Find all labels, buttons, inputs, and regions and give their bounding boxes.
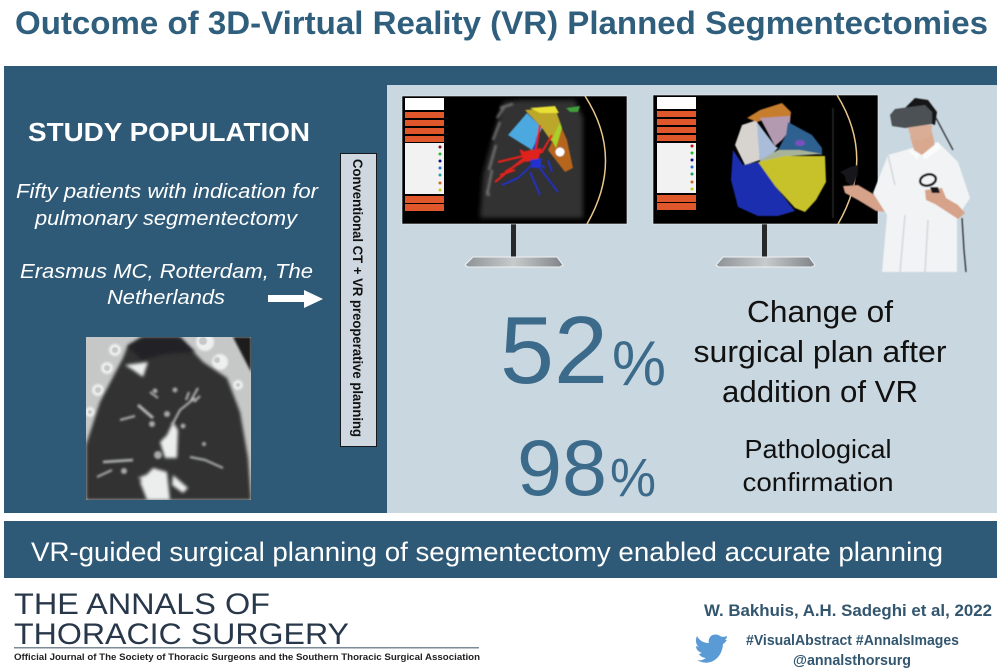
icon: twitter bird xyxy=(696,634,727,663)
stat: 98%: 98 xyxy=(517,423,607,512)
credit: authors: W. Bakhuis, A.H. Sadeghi et al, 2022 xyxy=(704,601,992,620)
screen xyxy=(653,95,878,224)
monitor: VR segment model xyxy=(653,95,878,267)
screen xyxy=(402,96,627,224)
stat: 98%: % xyxy=(610,448,656,508)
text: location: Netherlands xyxy=(107,287,225,309)
head xyxy=(907,125,932,140)
label: planning box xyxy=(340,154,376,446)
title: Outcome of 3D-Virtual Reality (VR) Planned Segmentectomies xyxy=(15,5,988,41)
text: pathological confirmation: Pathological xyxy=(744,434,892,464)
neck xyxy=(910,132,935,155)
image: CT lung scan xyxy=(85,333,251,500)
ring controller xyxy=(919,173,937,187)
stat: 98% xyxy=(517,423,656,512)
headset xyxy=(890,105,932,128)
label: planning box: Conventional CT + VR preoperative planning xyxy=(350,159,366,437)
panel: study population xyxy=(16,117,323,500)
text: hashtags: #VisualAbstract #AnnalsImages xyxy=(746,633,959,649)
stat: 52%: 52 xyxy=(500,297,608,404)
text: patients: pulmonary segmentectomy xyxy=(34,208,298,230)
right arm xyxy=(925,188,965,219)
cable xyxy=(936,118,966,272)
logo: Annals of Thoracic Surgery: Official Journal of The Society of Thoracic Surgeons and the Southern Thoracic Surgical Association xyxy=(14,652,480,663)
monitor: lung CT xyxy=(402,96,627,267)
3D lung model xyxy=(731,103,833,218)
monitor stand xyxy=(465,224,563,267)
arc xyxy=(837,95,857,224)
stat: 52%: % xyxy=(612,329,666,399)
text: change of surgical plan: addition of VR xyxy=(722,374,918,409)
arrow xyxy=(268,290,323,308)
stat: 52% xyxy=(500,297,666,404)
logo: Annals of Thoracic Surgery: THORACIC SURGERY xyxy=(14,618,349,651)
orange menu xyxy=(657,97,696,210)
text: pathological confirmation: confirmation xyxy=(742,467,894,497)
text: change of surgical plan: surgical plan after xyxy=(694,334,946,369)
scan body xyxy=(480,100,583,218)
banner: conclusion: VR-guided surgical planning of segmentectomy enabled accurate planning xyxy=(31,537,943,567)
logo: Annals of Thoracic Surgery: THE ANNALS OF xyxy=(14,588,270,621)
text: location: Erasmus MC, Rotterdam, The xyxy=(20,261,313,283)
panel: study background xyxy=(4,66,997,513)
coat xyxy=(873,142,970,272)
heading: study population: STUDY POPULATION xyxy=(28,117,310,147)
figure: surgeon with VR headset xyxy=(840,98,970,272)
arc xyxy=(585,96,606,224)
logo: Annals of Thoracic Surgery xyxy=(14,588,480,663)
left arm xyxy=(843,185,888,212)
text: change of surgical plan: Change of xyxy=(747,294,893,329)
text: patients: Fifty patients with indication for xyxy=(16,181,319,203)
left controller xyxy=(840,165,858,186)
text: handle: @annalsthorsurg xyxy=(793,653,911,669)
panel: results background xyxy=(387,85,997,513)
banner: conclusion xyxy=(4,521,997,578)
orange menu xyxy=(405,98,444,211)
monitor stand xyxy=(716,224,815,267)
